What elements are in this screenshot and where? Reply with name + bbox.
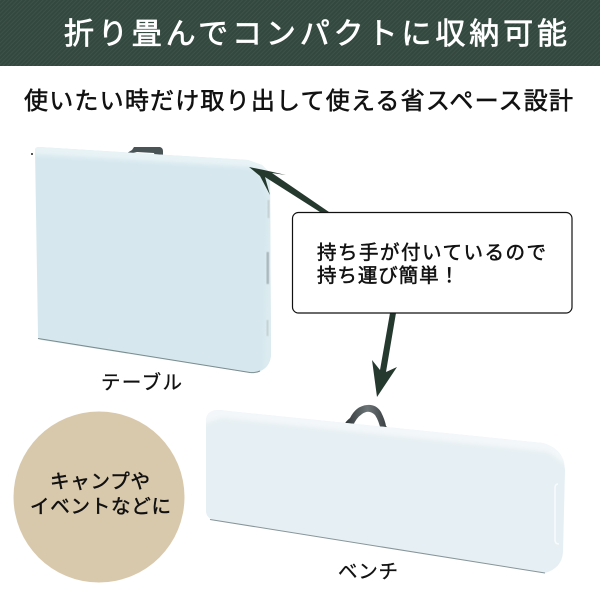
arrow: to table handle	[249, 167, 329, 212]
badge: camping and events: イベントなどに	[30, 496, 171, 518]
table label: テーブル	[101, 371, 182, 394]
folded bench illustration	[200, 405, 572, 573]
icon: table handle	[127, 147, 163, 156]
folded table illustration	[30, 140, 275, 373]
badge: camping and events	[14, 412, 184, 582]
header band	[0, 0, 600, 66]
bench label: ベンチ	[338, 561, 398, 583]
subtitle: 使いたい時だけ取り出して使える省スペース設計	[24, 88, 573, 115]
callout: 持ち手が付いているので	[317, 242, 546, 264]
callout: 持ち運び簡単！	[317, 265, 459, 287]
callout	[292, 212, 572, 313]
arrow: to bench handle	[372, 313, 397, 397]
badge: camping and events: キャンプや	[50, 471, 150, 493]
icon: bench handle	[344, 405, 391, 431]
title: 折り畳んでコンパクトに収納可能	[64, 18, 567, 51]
